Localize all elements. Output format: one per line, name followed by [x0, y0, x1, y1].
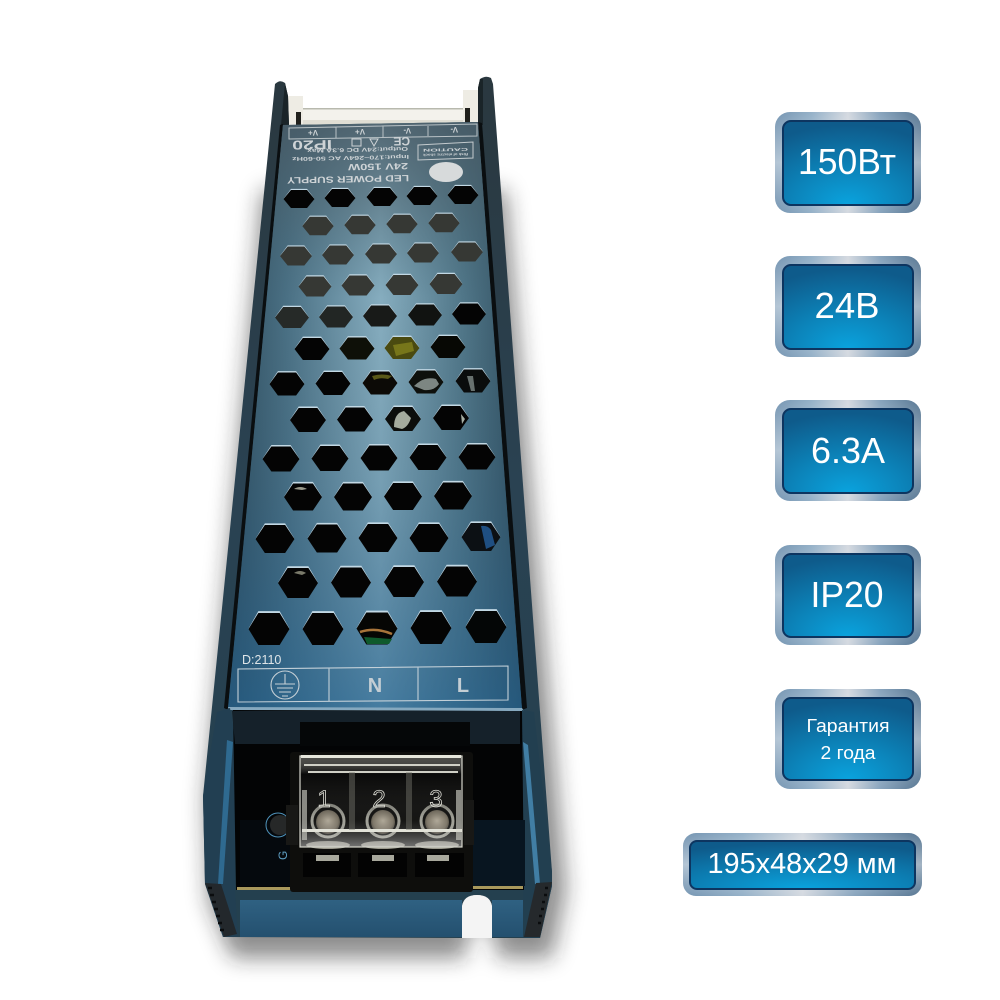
cavity — [233, 710, 524, 890]
badge: warranty — [775, 689, 921, 789]
components seen through holes — [294, 342, 495, 644]
badge: warranty: 2 года — [820, 743, 877, 763]
badge: power — [775, 112, 921, 213]
rail ends: ribbed grille left — [205, 883, 237, 937]
panel lower highlight edge — [228, 707, 524, 711]
screw: 3 — [415, 805, 459, 849]
terminal numbers — [317, 786, 443, 813]
black strip right — [478, 122, 527, 710]
badge: warranty: Гарантия — [806, 716, 890, 736]
screw: 2 — [361, 805, 405, 849]
circuit board right — [473, 820, 525, 886]
label strip: earth, N, L — [238, 666, 508, 702]
lip under the panel — [232, 711, 520, 744]
ventilation hexagons — [248, 185, 506, 645]
badge: voltage: 24В — [814, 285, 880, 326]
top label: output markings: V+ — [308, 128, 318, 137]
terminal numbers: 3 — [429, 786, 443, 813]
top label: output markings: V- — [403, 126, 411, 135]
connector: top output terminal — [287, 90, 479, 126]
drop shadow — [205, 190, 566, 958]
terminal numbers: 1 — [317, 786, 331, 813]
top label: output markings: Output:24V DC 6.3A Max — [306, 145, 408, 153]
gold edge — [237, 886, 523, 890]
top label: output markings: Input:170~264V AC 50-60Hz — [292, 153, 409, 161]
label: date code: D:2110 — [242, 653, 281, 667]
badge: dimensions: 195х48х29 мм — [708, 848, 896, 880]
top label: output markings: CE — [393, 134, 410, 148]
screw: 1 — [306, 805, 350, 849]
top label: output markings — [287, 124, 477, 185]
top label: output markings: V- — [450, 125, 458, 134]
badge: current — [775, 400, 921, 501]
terminal clips — [316, 855, 449, 861]
label strip: earth, N, L: L — [457, 675, 469, 697]
label strip: earth, N, L: N — [368, 675, 382, 697]
terminal block — [286, 752, 474, 892]
clear cover — [300, 755, 462, 847]
badge: current: 6.3А — [811, 430, 885, 471]
terminal numbers: 2 — [372, 786, 386, 813]
top label: output markings: Risk of electric shock — [423, 152, 468, 157]
terminal pockets — [303, 853, 464, 877]
badge: power: 150Вт — [798, 141, 896, 182]
rail ends: ribbed grille right — [524, 882, 552, 937]
badge: protection class: IP20 — [810, 574, 884, 615]
top label: output markings: IP20 — [292, 137, 332, 153]
badge: voltage — [775, 256, 921, 357]
top label: output markings: CAUTION — [423, 147, 468, 153]
panel: perforated top cover — [228, 122, 522, 709]
badge: protection class — [775, 545, 921, 645]
bottom plate — [240, 900, 523, 937]
ground screw — [266, 813, 290, 860]
icon: earth symbol — [271, 671, 299, 699]
terminal bay — [203, 708, 552, 938]
ground screw: G — [276, 851, 290, 860]
black strip left — [224, 124, 283, 710]
top label: output markings: V+ — [355, 127, 365, 136]
housing: rails and silhouette — [203, 77, 552, 938]
product photo: LED power supply — [203, 77, 566, 958]
rail: left blue edge — [203, 708, 238, 937]
top label: output markings: 24V 150W — [347, 161, 408, 172]
circuit board left — [240, 820, 295, 886]
top label: output markings: LED POWER SUPPLY — [287, 173, 409, 185]
badge: dimensions — [683, 833, 922, 896]
rail: right blue edge — [521, 710, 552, 938]
